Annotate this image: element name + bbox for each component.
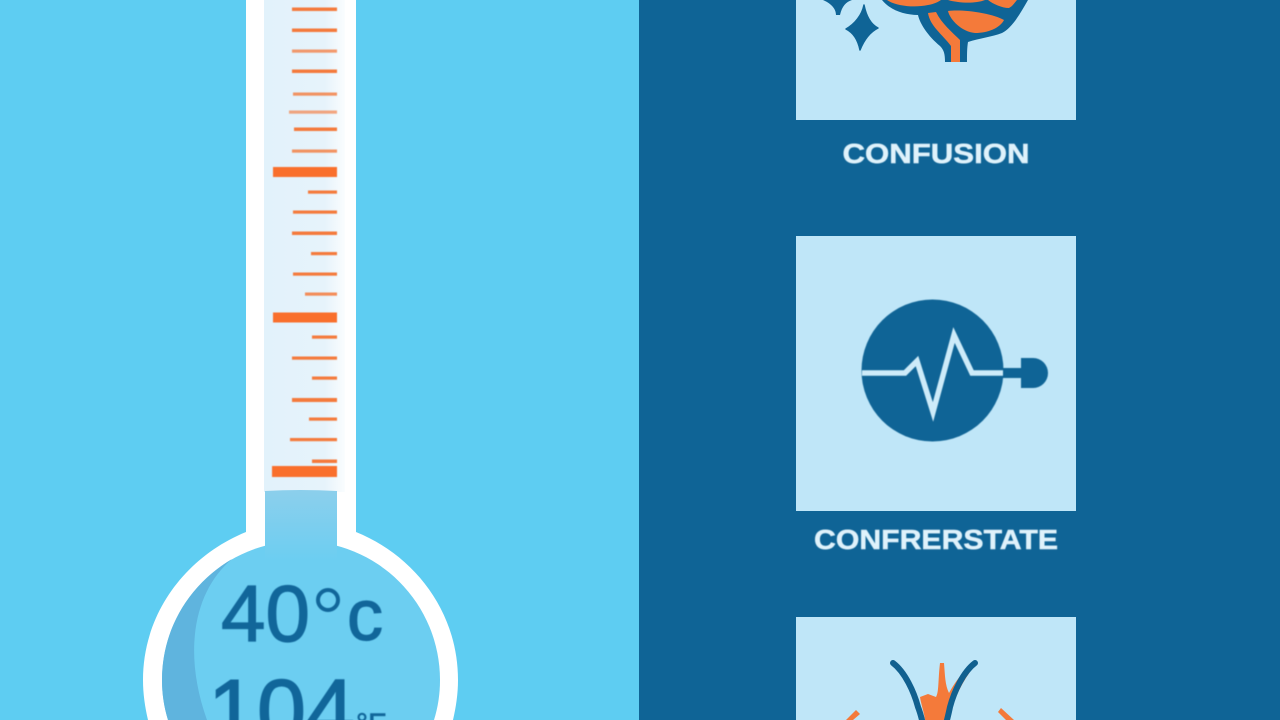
icon: orange splash with curved lines — [846, 663, 1014, 720]
right dark curve — [947, 663, 975, 720]
temperature celsius: 40 — [221, 569, 310, 658]
pulse line — [862, 335, 1003, 412]
thermometer — [143, 0, 458, 720]
brain orange top right lobe — [988, 0, 1017, 8]
thermometer outer shell — [143, 0, 458, 720]
icon: large sparkle — [846, 5, 878, 50]
scale ticks — [272, 8, 337, 477]
left orange ray — [846, 710, 860, 720]
icon: small sparkle — [823, 0, 852, 15]
right orange ray — [998, 708, 1014, 720]
brain orange stem — [928, 12, 960, 62]
thermometer bulb fill — [162, 490, 440, 720]
left dark curve — [893, 663, 922, 720]
monitor knob — [1021, 358, 1048, 388]
label: confrerstate: CONFRERSTATE — [814, 524, 1058, 555]
card background — [796, 236, 1076, 511]
brain orange top middle lobe — [948, 0, 985, 3]
orange splash — [920, 663, 970, 720]
thermometer tube — [264, 0, 345, 492]
panel: left background — [0, 0, 639, 720]
label: confusion: CONFUSION — [842, 138, 1030, 169]
degree sign — [318, 590, 338, 610]
panel: confrerstate card — [796, 236, 1076, 555]
card background — [796, 0, 1076, 120]
monitor disc — [862, 300, 1004, 442]
brain orange lower lobe — [948, 10, 1004, 33]
celsius unit: c — [347, 576, 383, 656]
card background — [796, 617, 1076, 720]
brain orange top lobe — [887, 0, 941, 6]
icon: brain — [823, 0, 1028, 62]
panel: confusion card — [796, 0, 1076, 169]
icon: pulse monitor — [862, 300, 1048, 442]
panel: right background — [639, 0, 1280, 720]
monitor connector — [1002, 368, 1022, 378]
brain outline — [882, 0, 1028, 62]
panel: third card — [796, 617, 1076, 720]
